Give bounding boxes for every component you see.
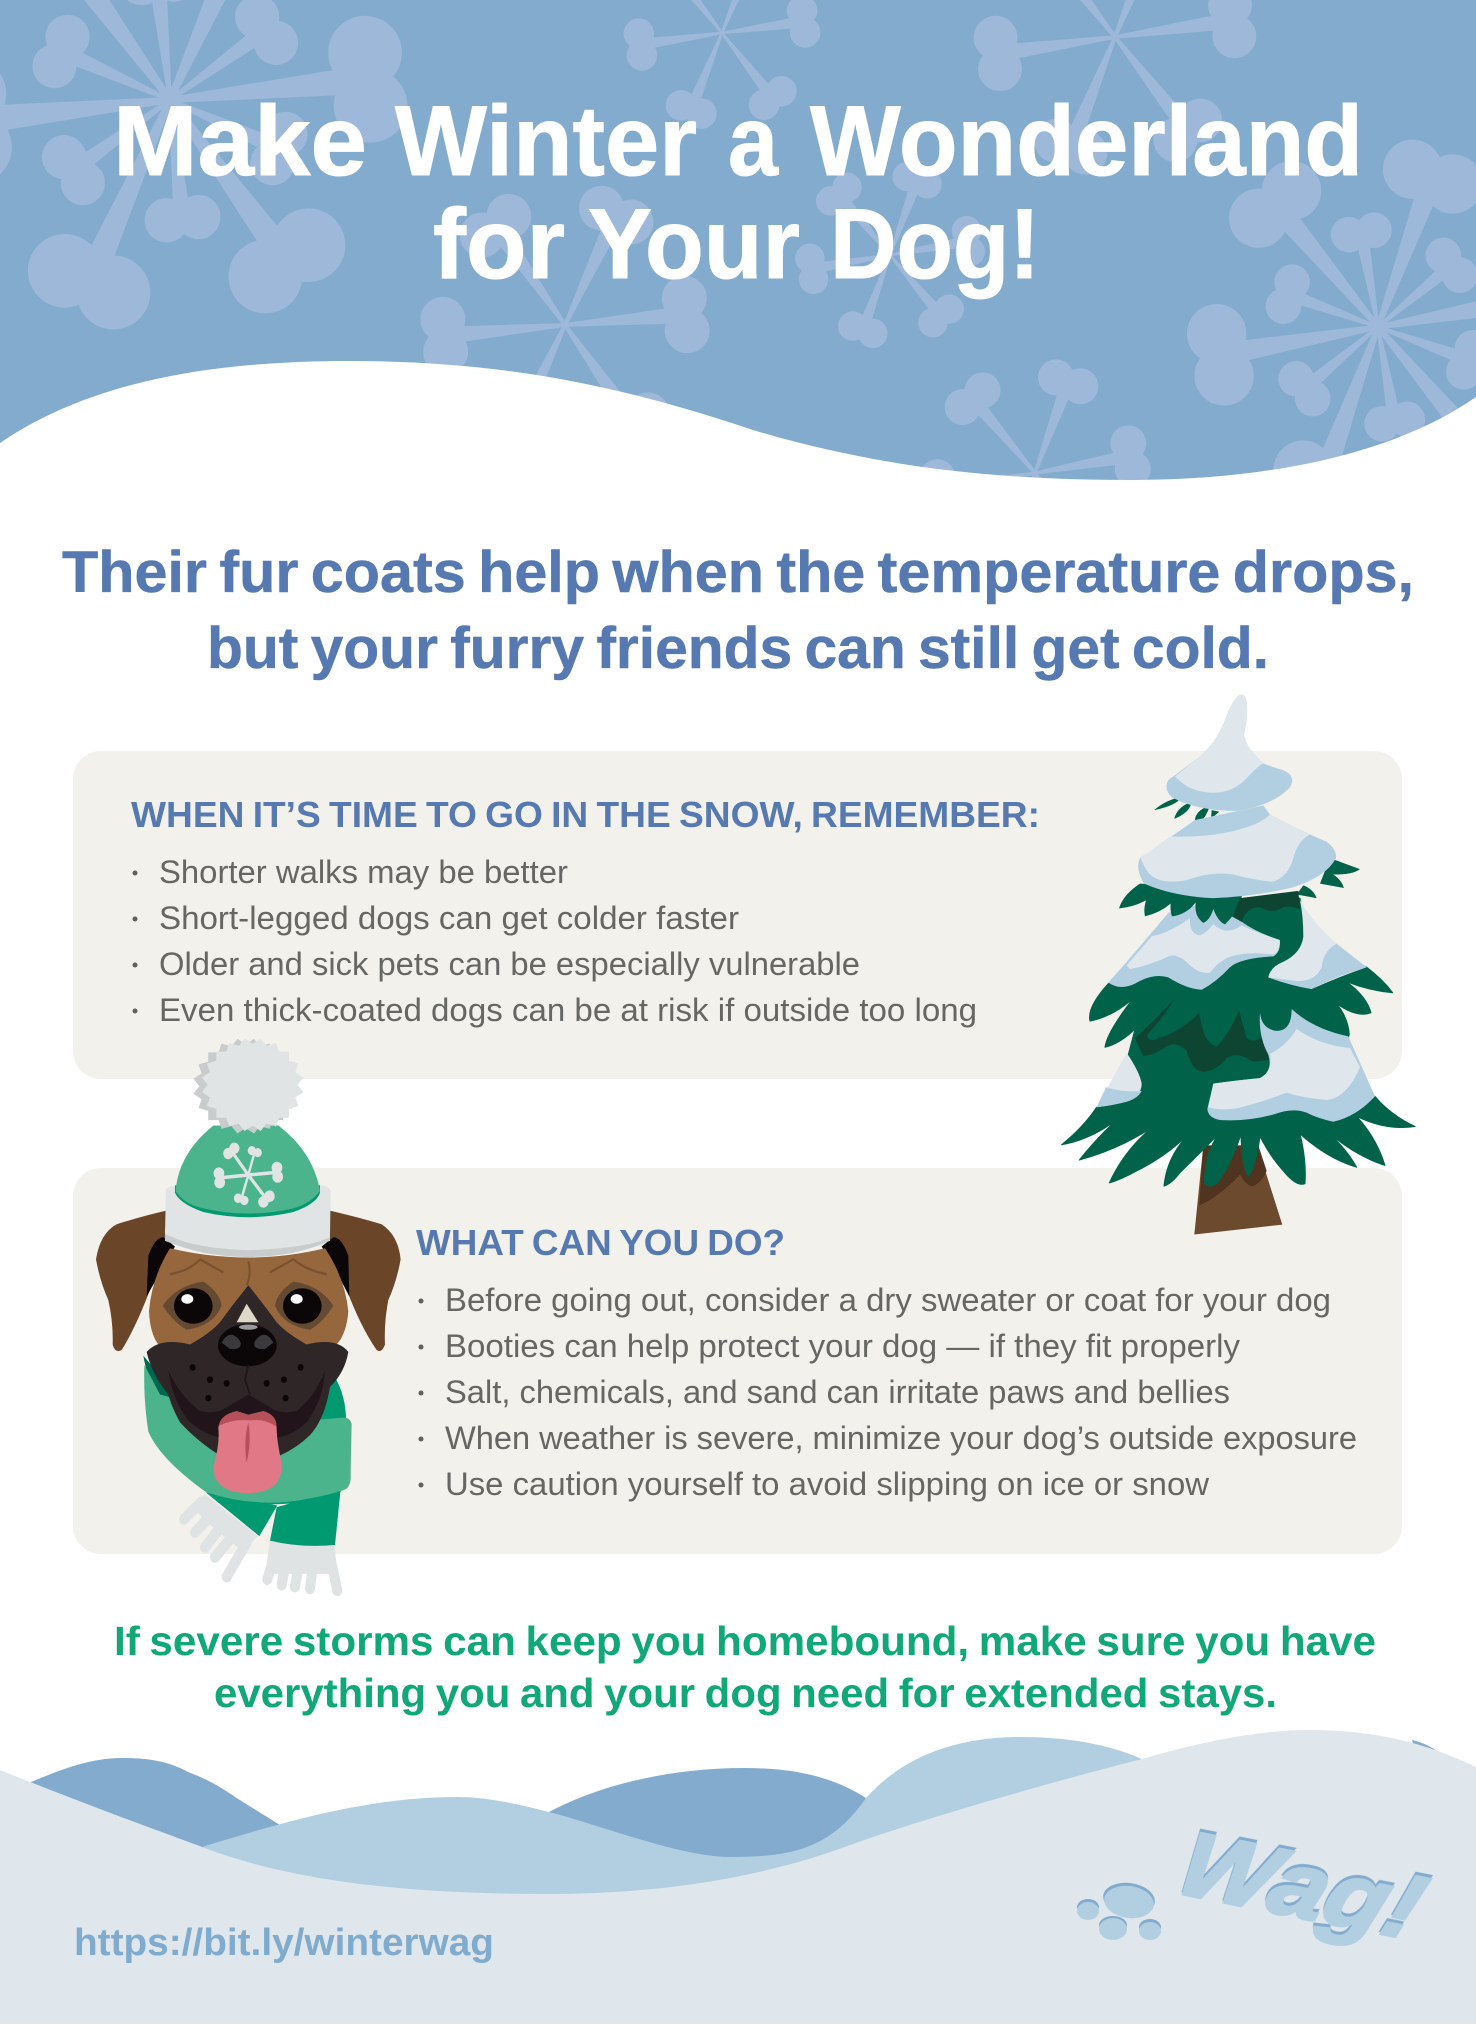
dark hills: [31, 1758, 280, 1870]
title: [113, 85, 1363, 299]
bullet list: [418, 1282, 1357, 1502]
panel: what can you do: [73, 1168, 1402, 1554]
snowflake pattern: [0, 0, 1476, 606]
subtitle: [62, 540, 1414, 681]
nose: [237, 1304, 258, 1322]
white snow wave: [0, 361, 1476, 700]
icon: paw print: [1077, 1880, 1161, 1940]
brow wrinkles: [170, 1259, 327, 1285]
bullet list: Even thick-coated dogs can be at risk if outside too long: [159, 992, 977, 1028]
bullet list: When weather is severe, minimize your dog’s outside exposure: [445, 1420, 1357, 1456]
url: https://bit.ly/winterwag: [74, 1922, 494, 1964]
title: Winter: [395, 85, 697, 196]
title: Make: [113, 85, 367, 196]
bullet list: [132, 854, 977, 1028]
panel heading: WHEN IT’S TIME TO GO IN THE SNOW, REMEMBER:: [131, 794, 1040, 835]
foliage: [1062, 898, 1415, 1186]
head: [149, 1248, 348, 1344]
closing message: everything you and your dog need for extended stays.: [214, 1670, 1277, 1716]
panel heading: WHAT CAN YOU DO?: [416, 1222, 785, 1263]
scarf wrap: [144, 1365, 352, 1503]
snow: lower right: [1207, 1009, 1375, 1122]
bullet list: Booties can help protect your dog — if they fit properly: [445, 1328, 1240, 1364]
tongue: [213, 1411, 282, 1493]
mid dark foliage shading: [1135, 998, 1269, 1072]
hat cuff: [165, 1230, 330, 1257]
title: Your: [588, 188, 800, 299]
ears: [96, 1211, 167, 1351]
light hills: [202, 1737, 1142, 1900]
closing message: If severe storms can keep you homebound, make sure you have: [114, 1618, 1376, 1664]
title: Dog!: [830, 188, 1040, 299]
bullet list: Older and sick pets can be especially vulnerable: [159, 946, 860, 982]
logo text: Wag!: [1165, 1813, 1439, 1958]
eye sockets: [163, 1282, 222, 1330]
scarf fringe: [184, 1502, 337, 1591]
panel: when it's time to go in the snow: [73, 751, 1402, 1079]
header banner: [0, 0, 1476, 700]
snow: lower left: [1097, 1053, 1142, 1107]
subtitle: but your furry friends can still get cold.: [207, 616, 1269, 681]
bullet list: Short-legged dogs can get colder faster: [159, 900, 739, 936]
muzzle: [147, 1285, 348, 1456]
top dark foliage shading: [1233, 891, 1300, 922]
top green skirt: [1119, 884, 1243, 924]
eyes: [174, 1288, 213, 1324]
snow: top cap: [1166, 695, 1292, 811]
snowy hills: [0, 1730, 1476, 2024]
hat snowflake: [213, 1140, 284, 1210]
top twigs: [1154, 797, 1360, 898]
snow: middle left: [1108, 905, 1280, 990]
title: for: [433, 188, 565, 299]
icon: dog with hat and scarf: [96, 1039, 401, 1591]
closing message: [114, 1618, 1376, 1716]
subtitle: Their fur coats help when the temperature drops,: [62, 540, 1414, 605]
hat pompom: [193, 1039, 303, 1134]
scarf back: [313, 1374, 346, 1437]
whisker dots: [190, 1364, 304, 1401]
hat dome: [175, 1185, 320, 1217]
title: Wonderland: [810, 85, 1363, 196]
ground: [0, 1730, 1476, 2024]
scarf tails: [206, 1492, 277, 1536]
snow: second tier: [1138, 805, 1336, 898]
inner mouth: [168, 1370, 325, 1439]
icon: snowy pine tree: [1062, 695, 1415, 1234]
bullet list: Salt, chemicals, and sand can irritate paws and bellies: [445, 1374, 1230, 1410]
bullet list: Use caution yourself to avoid slipping on ice or snow: [445, 1466, 1210, 1502]
bullet list: Before going out, consider a dry sweater or coat for your dog: [445, 1282, 1331, 1318]
logo: Wag! with paw print: [1077, 1813, 1439, 1958]
bullet list: Shorter walks may be better: [159, 854, 568, 890]
title: a: [728, 85, 779, 196]
tree trunk: [1194, 1145, 1282, 1234]
snow: middle right: [1268, 900, 1367, 989]
